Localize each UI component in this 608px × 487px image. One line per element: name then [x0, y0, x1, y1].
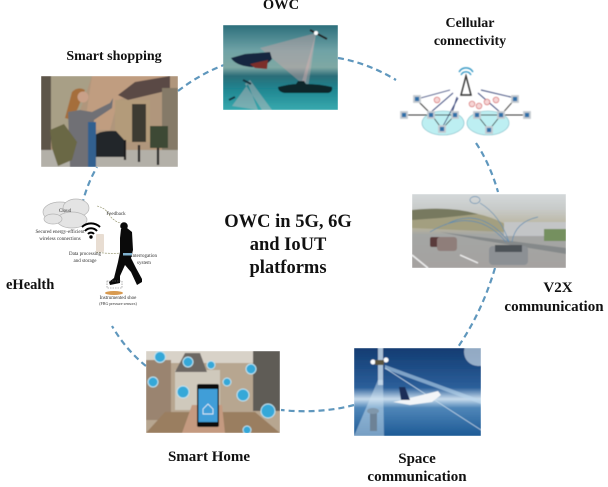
center title: platforms — [249, 258, 327, 278]
diagram: eHealth system: Secured energy-efficient — [35, 230, 85, 235]
label: Smart Home: Smart Home — [168, 449, 250, 465]
diagram: eHealth system: Interrogation — [131, 254, 158, 259]
image: underwater optical communication — [223, 25, 338, 110]
wifi icon — [82, 223, 100, 234]
center title: OWC in 5G, 6G — [224, 212, 352, 232]
diagram: eHealth system: and storage — [74, 259, 97, 264]
diagram: eHealth system: Feedback — [106, 212, 126, 217]
walking person — [109, 228, 142, 285]
label: Space communication: Space — [398, 451, 436, 467]
label: Space communication: communication — [367, 469, 467, 485]
diagram: eHealth system — [35, 199, 158, 306]
image: V2X highway — [412, 194, 566, 268]
label: Cellular connectivity: connectivity — [434, 34, 506, 49]
diagram: eHealth system: system — [137, 261, 151, 266]
image: woman shopping on street — [41, 76, 178, 167]
label: eHealth: eHealth — [6, 277, 54, 293]
dashed connecting ring — [82, 58, 498, 411]
diagram: cellular network — [401, 68, 530, 135]
diagram: eHealth system: Cloud — [59, 209, 72, 214]
shoe sensor — [107, 281, 122, 288]
label: Cellular connectivity: Cellular — [446, 16, 494, 31]
label: V2X communication: communication — [504, 299, 604, 315]
cloud — [43, 199, 89, 228]
diagram: eHealth system: wireless connections — [39, 237, 81, 242]
diagram: eHealth system: Data processing — [69, 252, 102, 257]
center title: and IoUT — [250, 235, 327, 255]
label: V2X communication: V2X — [543, 280, 573, 296]
image: space communication — [354, 348, 481, 436]
diagram: eHealth system: Instrumented shoe — [100, 296, 137, 301]
label: Smart shopping: Smart shopping — [66, 49, 162, 64]
image: smart home — [146, 351, 280, 434]
diagram: eHealth system: (FBG pressure sensors) — [99, 301, 137, 306]
